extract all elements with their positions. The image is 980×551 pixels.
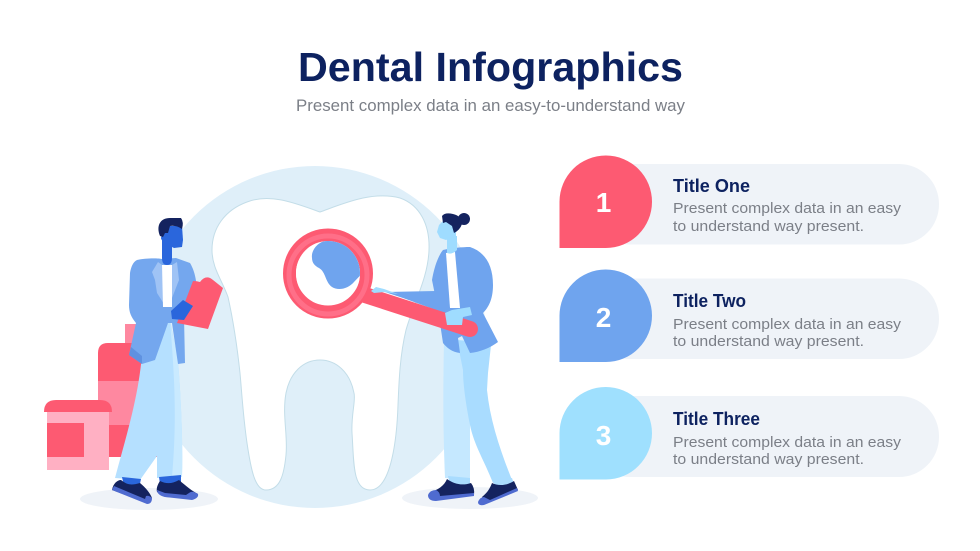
panel: item two: Present complex data in an easy [673,316,902,333]
man jacket [129,258,196,364]
panel: item three: to understand way present. [673,451,864,468]
panel: item one: Present complex data in an easy [673,200,902,217]
title: Dental Infographics [298,44,683,90]
man neck and head [158,218,183,265]
panel: item one: to understand way present. [673,218,864,235]
panel: item three: Title Three [673,409,760,429]
ground shadow: woman [402,487,538,509]
panel: item three: Present complex data in an easy [673,434,902,451]
ground shadow: man [80,488,218,510]
figure: woman arm behind magnifier [385,291,439,311]
icon: front jar [44,400,112,470]
woman shirt [446,252,460,308]
panel: item two: Title Two [673,291,746,311]
panel: item one: 1 [596,187,611,218]
woman hand on handle [445,307,472,325]
man shoes [112,475,198,504]
subtitle: Present complex data in an easy-to-understand way [296,96,685,115]
panel: item one: Title One [673,176,750,196]
woman shoes [428,476,518,505]
tooth cavity [312,241,360,289]
icon: large tooth [212,196,429,490]
woman jacket [432,247,498,353]
panel: item three [559,387,939,480]
figure: man with clipboard [112,218,223,504]
icon: magnifying glass [289,235,470,329]
man jacket tail [129,347,142,364]
panel: item one [560,155,939,248]
panel: item two: to understand way present. [673,333,864,350]
man hand [171,300,193,320]
woman head [437,213,470,254]
background circle [144,166,486,508]
panel: item two [559,270,939,362]
man trousers [115,320,182,480]
clipboard [177,277,223,329]
man shirt [162,265,172,307]
man left lapel [152,262,164,304]
woman fingers on lens [371,287,398,294]
panel: item three: 3 [596,420,611,451]
man right lapel [172,262,179,298]
woman trousers [443,340,512,483]
panel: item two: 2 [596,302,611,333]
icon: back bottle [98,324,157,457]
